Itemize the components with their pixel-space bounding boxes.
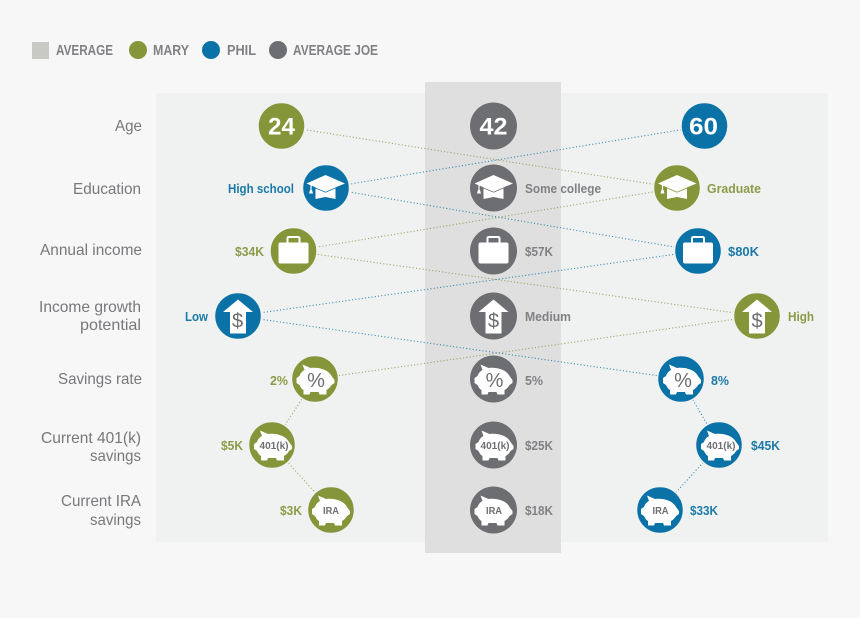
legend: AVERAGE JOE bbox=[293, 43, 378, 59]
Mary IRA: IRA bbox=[323, 505, 339, 517]
Phil IRA: $33K bbox=[690, 503, 719, 518]
row labels: Age bbox=[115, 118, 142, 135]
Average savings rate: % bbox=[486, 370, 504, 392]
Phil income growth: Low bbox=[185, 309, 209, 324]
Mary 401k bbox=[221, 422, 296, 468]
Phil 401k: $45K bbox=[751, 438, 781, 453]
Phil savings rate: % bbox=[674, 370, 692, 392]
Phil income growth bbox=[185, 292, 262, 340]
Mary IRA: $3K bbox=[280, 503, 303, 518]
Average education: Some college bbox=[525, 181, 601, 196]
Mary 401k: $5K bbox=[221, 438, 244, 453]
row labels: savings bbox=[90, 512, 141, 529]
Mary age: 24 bbox=[268, 114, 295, 140]
Mary column bbox=[221, 102, 814, 534]
Mary education: Graduate bbox=[707, 181, 761, 196]
Mary income growth bbox=[734, 292, 814, 340]
row labels bbox=[39, 118, 142, 529]
Phil income growth: $ bbox=[232, 310, 243, 332]
Mary savings rate: 2% bbox=[270, 373, 288, 388]
Average savings rate bbox=[470, 356, 543, 402]
Mary income bbox=[235, 228, 317, 274]
Phil column bbox=[185, 102, 781, 534]
Average IRA: $18K bbox=[525, 503, 554, 518]
Phil income: $80K bbox=[728, 244, 760, 259]
Phil education bbox=[228, 164, 350, 212]
legend: PHIL bbox=[227, 43, 256, 59]
Mary age bbox=[258, 102, 305, 150]
Average 401k bbox=[470, 422, 554, 468]
legend: AVERAGE bbox=[56, 43, 113, 59]
connector line: Phil bbox=[238, 126, 719, 510]
Average 401k: $25K bbox=[525, 438, 554, 453]
Phil IRA bbox=[636, 486, 719, 534]
Average income bbox=[470, 228, 554, 274]
Mary income: $34K bbox=[235, 244, 265, 259]
Phil 401k: 401(k) bbox=[706, 440, 736, 452]
row labels: Education bbox=[73, 181, 141, 198]
Mary 401k: 401(k) bbox=[260, 440, 288, 452]
Average age: 42 bbox=[480, 114, 508, 140]
Phil age: 60 bbox=[689, 114, 718, 140]
Phil 401k bbox=[696, 422, 781, 468]
Average income growth: Medium bbox=[525, 309, 571, 324]
Mary savings rate: % bbox=[307, 370, 325, 392]
Average income growth: $ bbox=[488, 310, 499, 332]
row labels: savings bbox=[90, 448, 141, 465]
legend bbox=[32, 41, 378, 59]
Phil education: High school bbox=[228, 181, 294, 196]
Average income growth bbox=[470, 292, 571, 340]
Average 401k: 401(k) bbox=[480, 440, 510, 452]
Phil savings rate: 8% bbox=[711, 373, 729, 388]
legend: MARY bbox=[153, 43, 189, 59]
panel: chart background bbox=[156, 93, 828, 542]
Phil income bbox=[674, 228, 760, 274]
row labels: Annual income bbox=[40, 242, 142, 259]
Average IRA bbox=[470, 486, 554, 534]
panel: average band bbox=[425, 82, 561, 553]
Mary income growth: High bbox=[788, 309, 814, 324]
row labels: Current IRA bbox=[61, 493, 141, 510]
Mary IRA bbox=[280, 486, 354, 534]
Phil IRA: IRA bbox=[652, 505, 669, 517]
Phil age bbox=[681, 102, 728, 150]
connector line: Mary bbox=[272, 126, 757, 510]
Average income: $57K bbox=[525, 244, 554, 259]
Average IRA: IRA bbox=[486, 505, 502, 517]
Average education bbox=[470, 164, 601, 212]
row labels: Income growth bbox=[39, 299, 141, 316]
Average savings rate: 5% bbox=[525, 373, 543, 388]
row labels: potential bbox=[80, 317, 141, 334]
row labels: Current 401(k) bbox=[41, 430, 141, 447]
Mary savings rate bbox=[270, 356, 338, 402]
Average Joe column bbox=[470, 102, 601, 534]
Average age bbox=[470, 102, 517, 150]
Mary education bbox=[654, 164, 761, 212]
row labels: Savings rate bbox=[58, 371, 142, 388]
Phil savings rate bbox=[658, 356, 729, 402]
Mary income growth: $ bbox=[751, 310, 763, 332]
